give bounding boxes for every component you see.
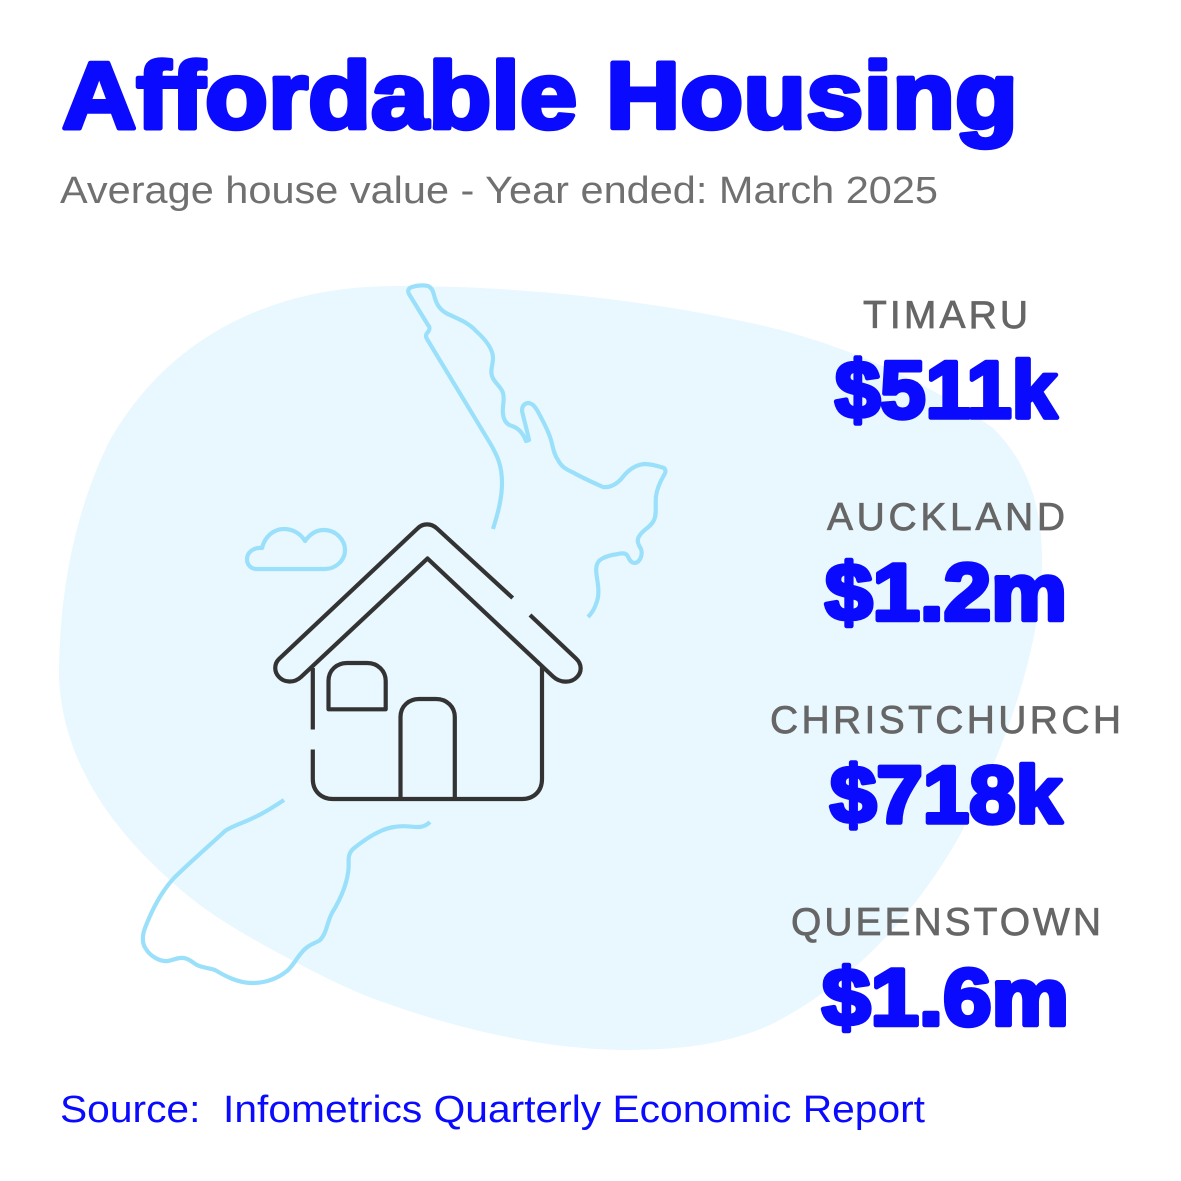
- stat: Timaru: [835, 294, 1058, 436]
- south island: [143, 800, 430, 983]
- stat: Christchurch: $718k: [830, 750, 1063, 840]
- stat: Queenstown: QUEENSTOWN: [791, 901, 1101, 944]
- stat: Christchurch: CHRISTCHURCH: [770, 699, 1121, 742]
- stat: Christchurch: [770, 699, 1121, 840]
- stat: Queenstown: [791, 901, 1101, 1043]
- background blob: [59, 286, 1042, 1050]
- stat: Timaru: $511k: [835, 346, 1058, 436]
- door: [400, 699, 455, 799]
- left wall: [313, 667, 542, 799]
- stat: Timaru: TIMARU: [863, 294, 1028, 337]
- north island: [408, 285, 666, 617]
- stat: Queenstown: $1.6m: [822, 953, 1069, 1043]
- roof: [275, 524, 581, 682]
- stat: Auckland: [825, 496, 1067, 638]
- title: Affordable Housing: [62, 43, 1018, 149]
- icon: house: [275, 524, 581, 799]
- icon: cloud: [247, 529, 345, 569]
- stat: Auckland: AUCKLAND: [827, 496, 1065, 539]
- stat: Auckland: $1.2m: [825, 548, 1067, 638]
- source note: Source: Infometrics Quarterly Economic Report: [60, 1089, 925, 1131]
- map: New Zealand outline: [143, 285, 665, 983]
- window: [328, 663, 386, 709]
- subtitle: Average house value - Year ended: March 2025: [60, 170, 938, 212]
